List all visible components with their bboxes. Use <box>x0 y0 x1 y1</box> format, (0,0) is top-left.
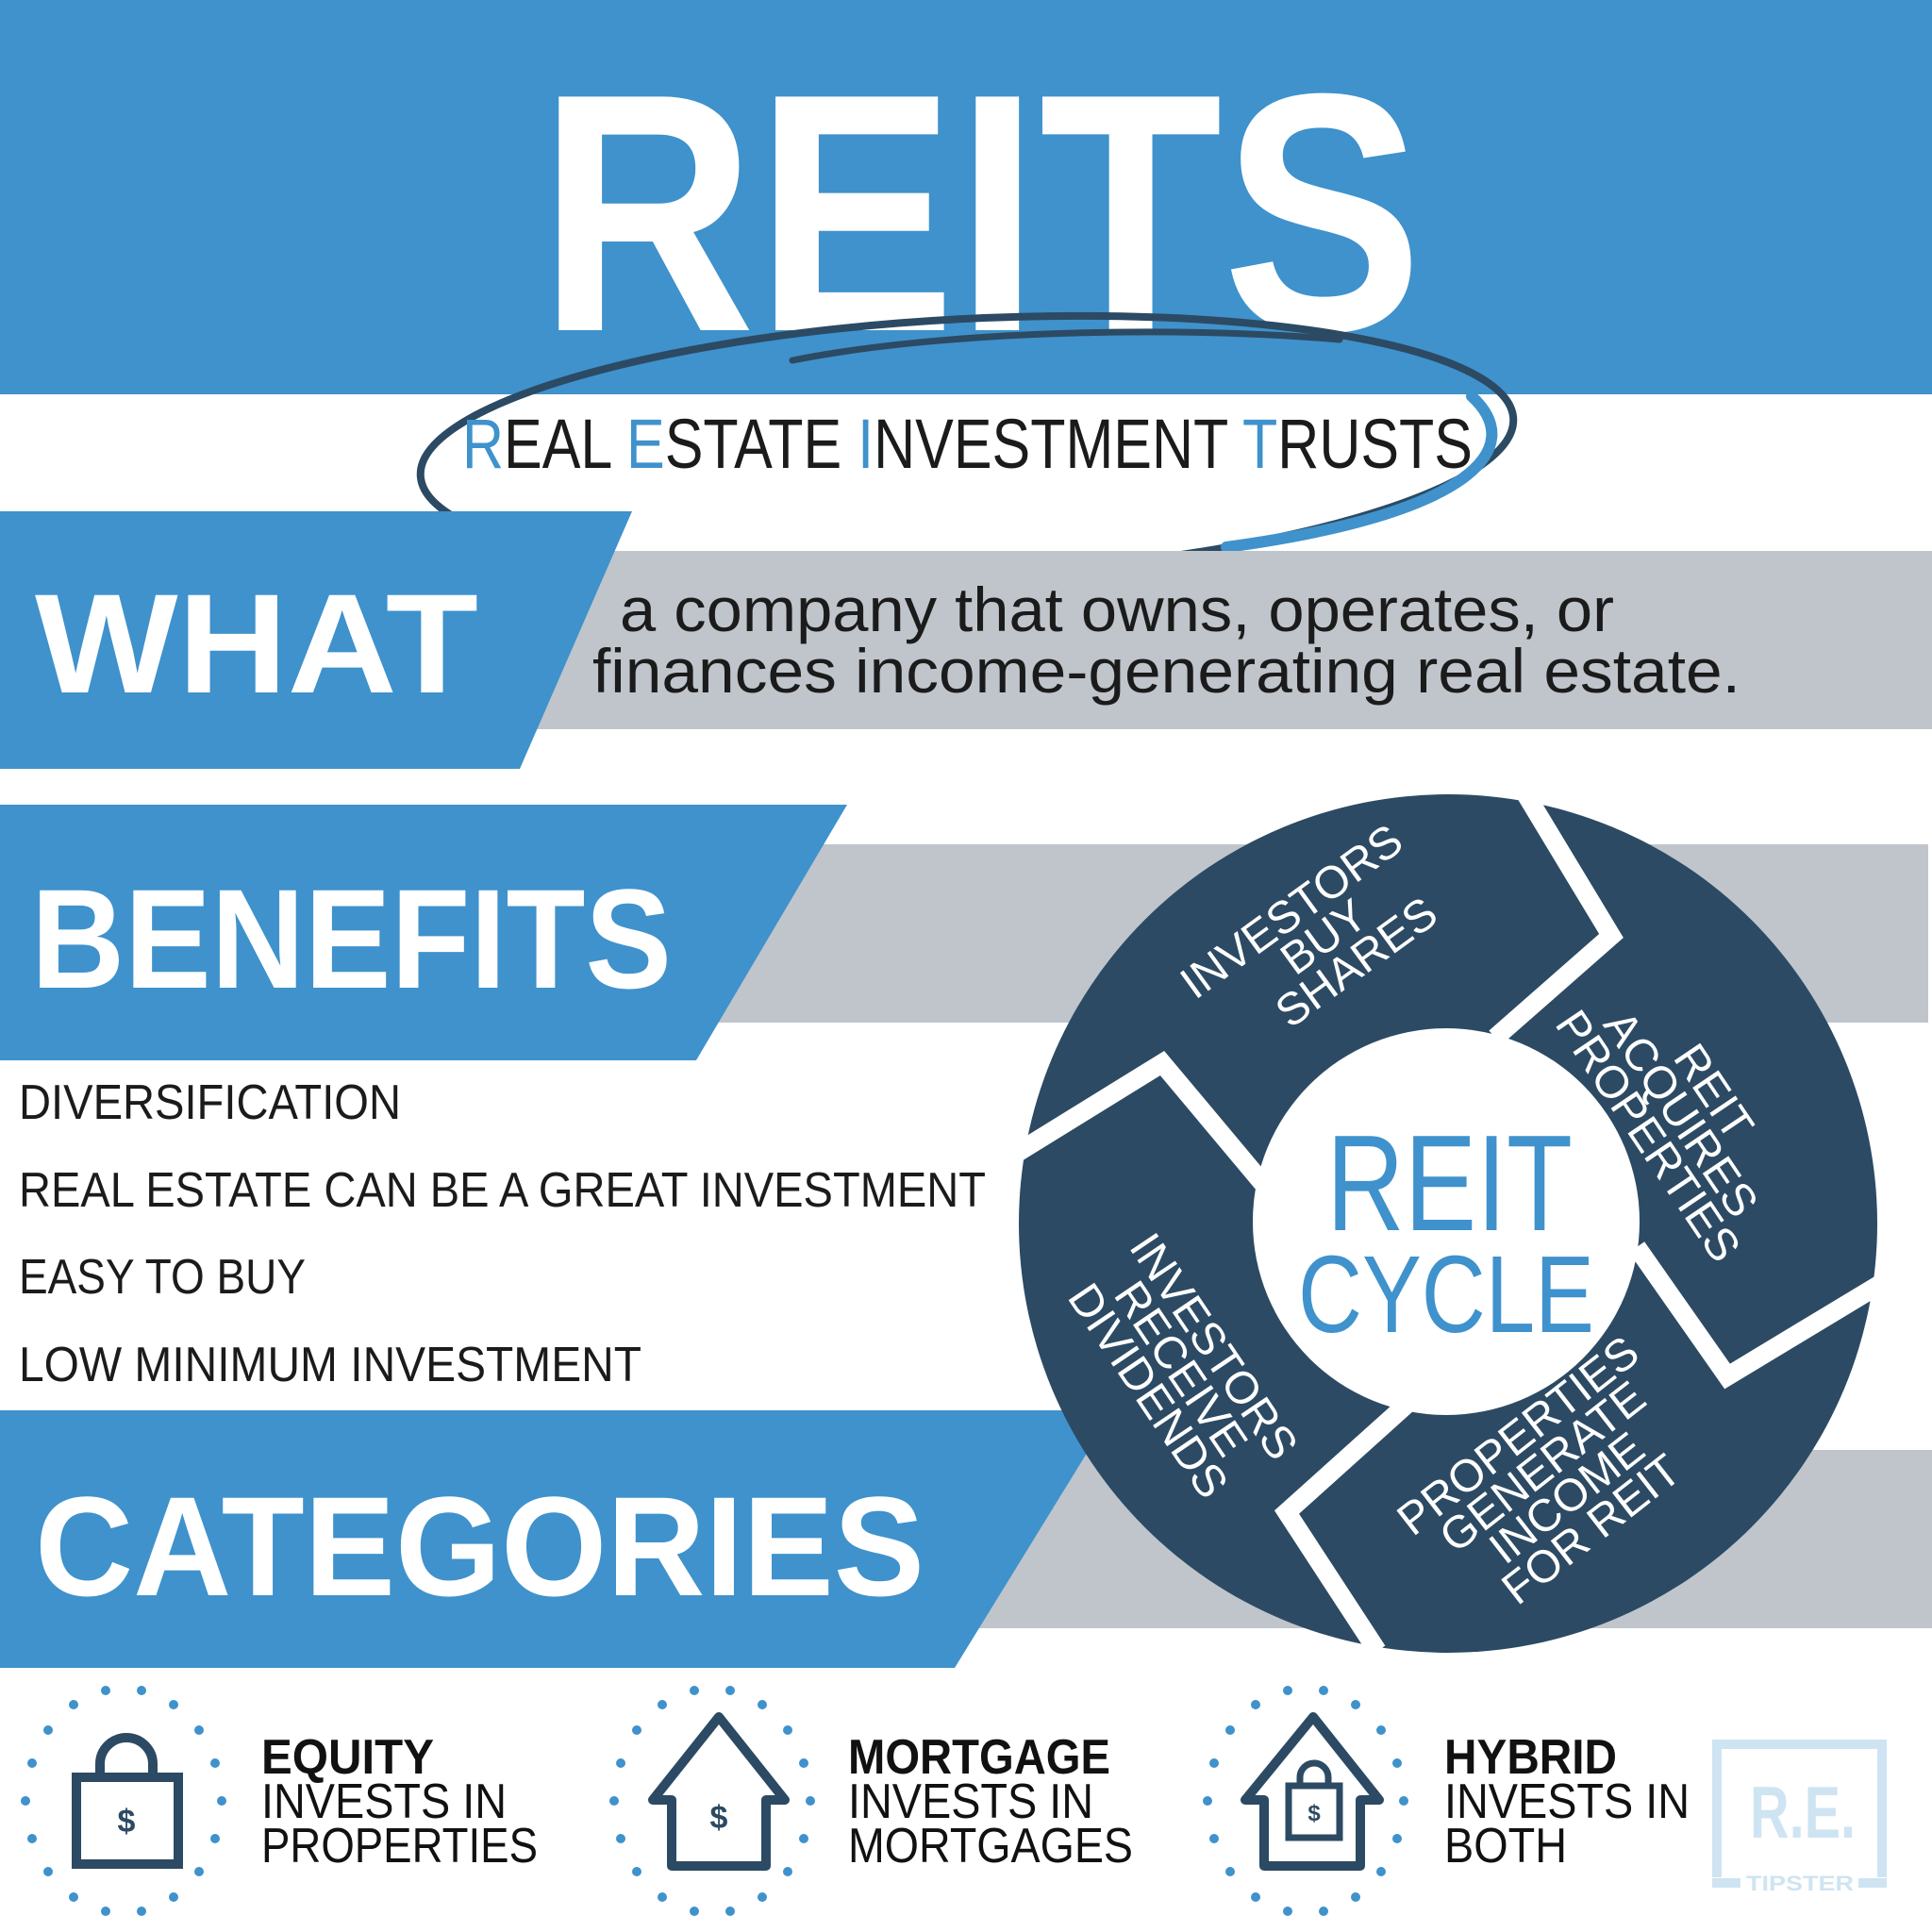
panel: categories: CATEGORIES <box>35 1467 924 1625</box>
text: hybrid: BOTH <box>1444 1819 1567 1874</box>
header band <box>0 0 1932 394</box>
subtitle: REAL ESTATE INVESTMENT TRUSTS <box>462 405 1473 483</box>
step: investors receive dividends: INVESTORS <box>1120 1224 1307 1469</box>
step: investors receive dividends <box>1054 1224 1307 1513</box>
panel: categories <box>0 1410 1113 1668</box>
text: mortgage: INVESTS IN <box>848 1774 1093 1829</box>
benefits list: DIVERSIFICATION <box>19 1075 401 1130</box>
cycle center label <box>1298 1107 1594 1356</box>
title: REITS <box>539 24 1423 403</box>
icon: hybrid house with lock: $ <box>1307 1801 1321 1826</box>
text: hybrid <box>1444 1730 1690 1874</box>
text: mortgage <box>848 1730 1133 1874</box>
ellipse scribble <box>414 291 1520 604</box>
gray band benefits <box>717 844 1928 1023</box>
panel: what: WHAT <box>35 564 478 723</box>
benefits list: LOW MINIMUM INVESTMENT <box>19 1338 641 1392</box>
text: hybrid: INVESTS IN <box>1444 1774 1690 1829</box>
icon: mortgage house <box>609 1686 815 1916</box>
benefits list: EASY TO BUY <box>19 1250 306 1305</box>
text: equity: INVESTS IN <box>261 1774 507 1829</box>
step: reit acquires properties <box>1545 958 1815 1271</box>
step: properties generate income: PROPERTIES <box>1389 1327 1649 1545</box>
panel: benefits <box>0 805 847 1060</box>
what description: a company that owns, operates, or <box>620 575 1614 644</box>
what description <box>592 575 1740 706</box>
text: equity: PROPERTIES <box>261 1819 538 1874</box>
step: investors buy shares: INVESTORS <box>1172 815 1412 1009</box>
gray band categories <box>943 1450 1932 1628</box>
step: properties generate income: INCOME <box>1480 1424 1654 1574</box>
step: properties generate income: GENERATE <box>1431 1372 1655 1563</box>
cycle center label: REIT <box>1326 1107 1573 1259</box>
step: investors buy shares: BUY <box>1272 890 1376 985</box>
step: investors buy shares <box>1172 815 1458 1073</box>
icon: equity lock <box>21 1686 226 1916</box>
step: investors receive dividends: DIVIDENDS <box>1058 1274 1237 1507</box>
step: reit acquires properties: ACQUIRES <box>1593 1002 1767 1226</box>
icon: mortgage house: $ <box>710 1800 728 1836</box>
step: reit acquires properties: REIT <box>1664 1036 1763 1149</box>
logo: R.E. tipster: TIPSTER <box>1746 1872 1854 1895</box>
step: investors receive dividends: RECEIVE <box>1104 1273 1257 1465</box>
gray band what <box>528 551 1932 729</box>
chart: reit cycle <box>1014 791 1882 1653</box>
logo: R.E. tipster <box>1712 1744 1887 1895</box>
icon: hybrid house with lock <box>1203 1686 1408 1916</box>
text: hybrid: HYBRID <box>1444 1730 1617 1785</box>
step: properties generate income <box>1389 1327 1722 1640</box>
step: properties generate income: FOR REIT <box>1493 1445 1690 1615</box>
icon: equity lock: $ <box>118 1804 136 1840</box>
panel: benefits: BENEFITS <box>31 859 672 1018</box>
what description: finances income-generating real estate. <box>592 636 1740 706</box>
step: reit acquires properties: PROPERTIES <box>1545 1002 1750 1271</box>
step: investors buy shares: SHARES <box>1267 888 1447 1038</box>
panel: what <box>0 511 632 769</box>
benefits list: REAL ESTATE CAN BE A GREAT INVESTMENT <box>19 1163 986 1218</box>
logo: R.E. tipster: R.E. <box>1750 1771 1856 1854</box>
text: equity <box>261 1730 538 1874</box>
cycle center label: CYCLE <box>1298 1233 1594 1356</box>
benefits list <box>19 1075 986 1392</box>
text: equity: EQUITY <box>261 1730 434 1785</box>
text: mortgage: MORTGAGE <box>848 1730 1110 1785</box>
text: mortgage: MORTGAGES <box>848 1819 1133 1874</box>
